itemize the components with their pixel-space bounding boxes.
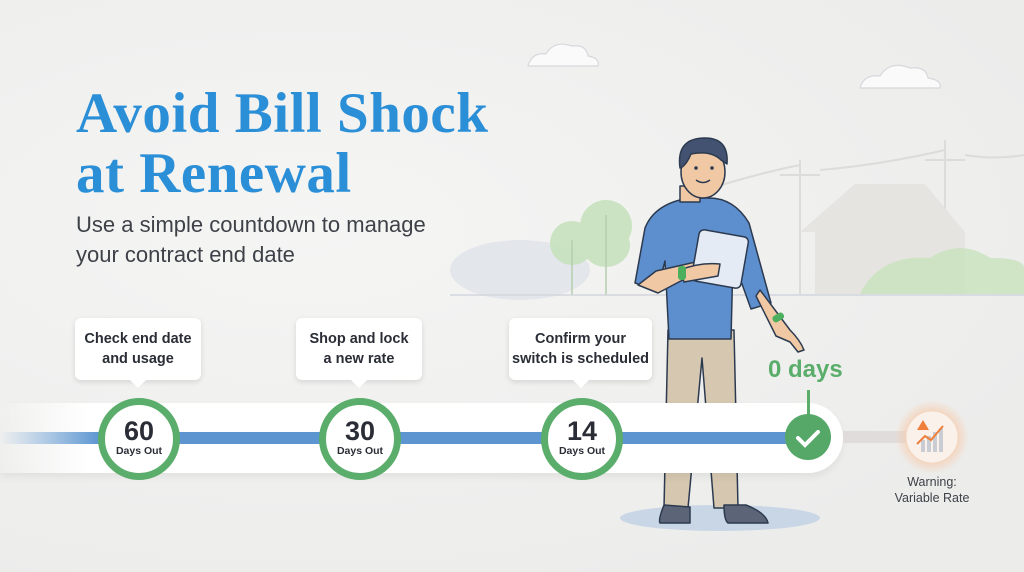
- node: 14 days: 14: [567, 416, 597, 446]
- callout: 30 days: Shop and lock: [309, 331, 409, 347]
- node: 14 days: Days Out: [559, 445, 605, 457]
- callout: 14 days: switch is scheduled: [512, 351, 649, 367]
- icon: warning variable rate: [898, 402, 966, 472]
- callout: 14 days: [509, 318, 652, 380]
- node: 14 days: [541, 398, 623, 480]
- callout: 30 days: a new rate: [324, 351, 394, 367]
- timeline track: [0, 403, 843, 473]
- subtitle: Use a simple countdown to manage: [76, 212, 426, 237]
- callout: 14 days: Confirm your: [535, 331, 626, 347]
- title: Avoid Bill Shock: [76, 82, 488, 145]
- callout: 30 days: [296, 318, 422, 380]
- label: warning: Variable Rate: [895, 491, 969, 505]
- node: 60 days: Days Out: [116, 445, 162, 457]
- node: 30 days: 30: [345, 416, 375, 446]
- node: 30 days: Days Out: [337, 445, 383, 457]
- connector line 0 days: [807, 390, 810, 416]
- subtitle: your contract end date: [76, 242, 295, 267]
- label: warning: Warning:: [907, 475, 957, 489]
- person: [634, 137, 805, 524]
- callout: 60 days: [75, 318, 201, 380]
- callout: 60 days: Check end date: [84, 331, 192, 347]
- node: 30 days: [319, 398, 401, 480]
- node: 60 days: 60: [124, 416, 154, 446]
- node: 60 days: [98, 398, 180, 480]
- subtitle: [76, 212, 426, 267]
- label: warning: [894, 475, 969, 505]
- title: [76, 82, 488, 205]
- icon: check circle: [785, 414, 831, 460]
- grey line to warning: [843, 431, 908, 443]
- label: 0 days: 0 days: [768, 356, 843, 383]
- shadow under person: [620, 505, 820, 531]
- callout: 60 days: and usage: [102, 351, 174, 367]
- title: at Renewal: [76, 142, 352, 205]
